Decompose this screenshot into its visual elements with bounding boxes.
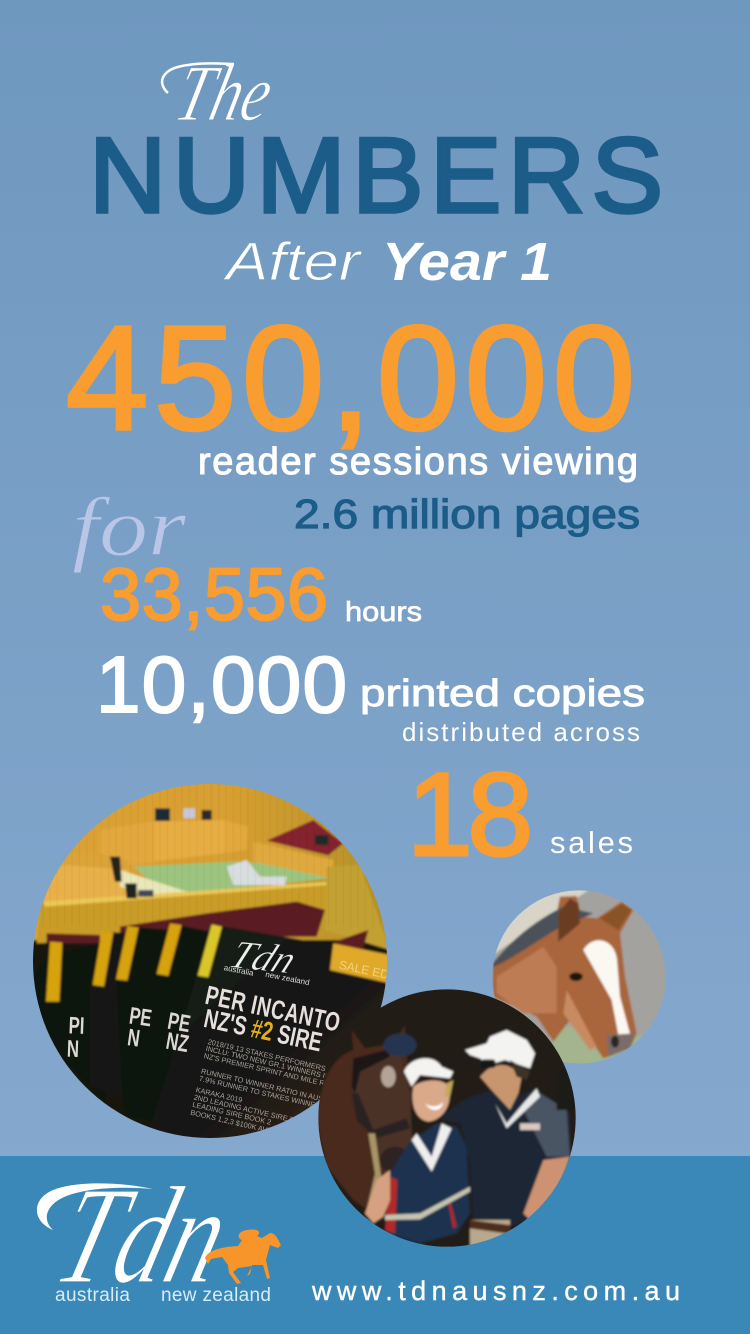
text: sales: sales	[550, 825, 633, 860]
magazine cover text: NZ	[164, 1028, 191, 1058]
script: for: for	[72, 481, 186, 574]
magazine cover text: SALE ED	[338, 958, 390, 982]
logo: new zealand: new zealand	[161, 1285, 271, 1306]
magazine cover text: NZ'S #2 SIRE	[201, 1003, 325, 1057]
logo: Tdn: Tdn	[41, 1158, 245, 1312]
wood panelling	[40, 780, 387, 927]
cap behind	[383, 1033, 417, 1057]
people in the ring	[110, 808, 328, 898]
magazine cover text: 2ND LEADING ACTIVE SIRE BOOK 1	[193, 1093, 317, 1129]
stat: 450,000: 450,000	[66, 296, 635, 461]
magazine cover text: PI	[68, 1012, 85, 1040]
subtitle: After Year 1: After	[222, 232, 362, 292]
magazine cover text: RUNNER TO WINNER RATIO IN AUS 61%	[200, 1067, 341, 1107]
magazine cover text: new zealand	[265, 970, 310, 987]
magazine cover text: INCLU: TWO NEW GR.1 WINNERS IN	[205, 1044, 331, 1081]
magazine cover text: KARAKA 2019	[195, 1085, 243, 1105]
stat: 10,000: 10,000	[96, 640, 347, 729]
logo swash	[37, 1183, 153, 1230]
logo: australia: australia	[55, 1285, 130, 1306]
text: printed copies: printed copies	[360, 673, 645, 715]
title: The: The	[168, 49, 282, 138]
footer band	[0, 1156, 750, 1334]
photo: couple with horse	[317, 987, 580, 1250]
magazine cover text: PER INCANTO	[203, 980, 343, 1037]
text: distributed across: distributed across	[402, 717, 640, 747]
magazine cover text: N	[126, 1024, 142, 1052]
magazine cover text: 2018/19 13 STAKES PERFORMERS	[207, 1037, 327, 1073]
magazine cover text: PE	[166, 1008, 192, 1038]
photo: sale ring and magazines	[33, 784, 387, 1138]
magazine cover text: PE	[128, 1003, 153, 1032]
magazine cover text: Tdn	[223, 932, 304, 982]
subtitle: After Year 1	[222, 232, 552, 292]
text: hours: hours	[345, 596, 422, 627]
website url: www.tdnausnz.com.au	[311, 1276, 680, 1306]
magazine cover text: 7.9% RUNNER TO STAKES WINNER	[198, 1074, 321, 1111]
logo: horse and jockey	[205, 1229, 281, 1284]
title: NUMBERS: NUMBERS	[89, 115, 663, 235]
magazine cover text: australia	[223, 963, 255, 978]
magazines	[33, 923, 390, 1140]
magazine cover text: N	[66, 1036, 80, 1063]
horse	[317, 1025, 414, 1213]
stat: 18: 18	[407, 749, 533, 881]
magazine cover text: NZ'S PREMIER SPRINT AND MILE RACES	[203, 1051, 345, 1092]
stat: 33,556: 33,556	[100, 553, 328, 636]
magazine cover text: BOOKS 1,2,3 $100K AVE	[190, 1108, 273, 1135]
text: reader sessions viewing: reader sessions viewing	[198, 441, 638, 483]
photo: foal	[490, 887, 670, 1067]
subtitle: After Year 1: Year 1	[382, 232, 552, 292]
text: 2.6 million pages: 2.6 million pages	[294, 491, 640, 537]
man	[385, 1030, 575, 1247]
woman	[365, 1058, 470, 1243]
magazine cover text: LEADING SIRE BOOK 2	[192, 1100, 272, 1127]
magazine cover text	[66, 932, 390, 1135]
